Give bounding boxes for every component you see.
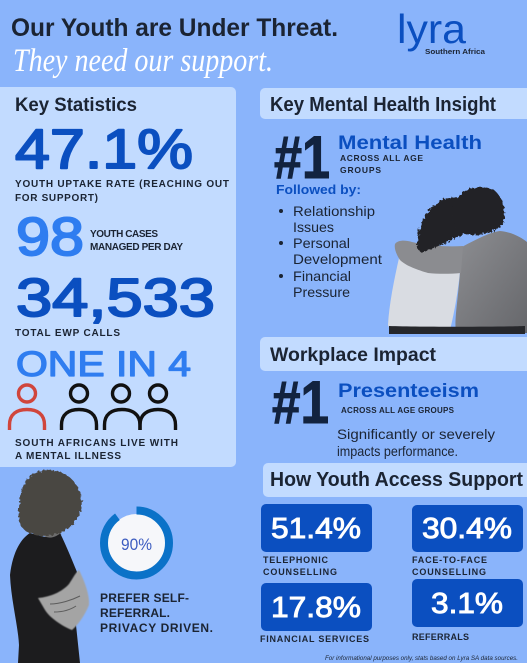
stat: #1 presenteeism: Presenteeism (338, 381, 479, 402)
stat: 47.1%: 47.1% (15, 117, 193, 180)
logo: Lyra Southern Africa: Southern Africa (425, 47, 486, 56)
stat: 98 (16, 207, 183, 267)
stat card: telephonic counselling: 51.4% (271, 513, 361, 545)
stat card: referrals (412, 579, 523, 642)
stat card: telephonic counselling: TELEPHONIC (263, 555, 328, 565)
stat: 98: 98 (16, 207, 84, 267)
title: They need our support. (13, 43, 273, 79)
stat: one in 4 (10, 345, 191, 462)
text: prefer self-referral: PRIVACY DRIVEN. (100, 621, 213, 635)
stat: #1 presenteeism: ACROSS ALL AGE GROUPS (341, 406, 455, 415)
stat card: face-to-face counselling: 30.4% (422, 513, 512, 545)
list: followed by: Financial (293, 268, 351, 284)
title: Our Youth are Under Threat. (11, 14, 338, 42)
stat: #1 mental health (274, 124, 482, 191)
list: followed by: Personal (293, 235, 350, 251)
text: prefer self-referral (100, 591, 213, 635)
heading panel: how youth access support (263, 463, 527, 497)
icon: four people (10, 385, 176, 430)
stat: #1 presenteeism: Significantly or severely (337, 426, 495, 442)
stat: 34,533: TOTAL EWP CALLS (15, 328, 120, 339)
title (11, 14, 338, 79)
heading panel: workplace impact: Workplace Impact (270, 345, 437, 366)
stat card: face-to-face counselling: FACE-TO-FACE (412, 555, 487, 565)
stat: 47.1%: YOUTH UPTAKE RATE (REACHING OUT (15, 179, 229, 190)
list: followed by: Development (293, 251, 382, 267)
stat: #1 mental health: GROUPS (340, 165, 381, 175)
heading: key statistics: Key Statistics (15, 95, 137, 116)
stat: 98: YOUTH CASES (90, 229, 158, 240)
chart: 90% donut: 90% (121, 535, 152, 554)
stat card: face-to-face counselling: COUNSELLING (412, 567, 486, 577)
stat: #1 presenteeism (272, 369, 495, 459)
text: prefer self-referral: REFERRAL. (100, 606, 170, 620)
heading panel: key mental health insight (260, 88, 527, 119)
stat: 47.1% (15, 117, 229, 204)
heading panel: how youth access support: How Youth Access Support (270, 469, 523, 491)
stat: one in 4: A MENTAL ILLNESS (15, 451, 121, 462)
stat card: financial services: FINANCIAL SERVICES (260, 634, 369, 644)
stat card: telephonic counselling (261, 504, 372, 577)
stat: 98: MANAGED PER DAY (90, 242, 183, 253)
text: prefer self-referral: PREFER SELF- (100, 591, 189, 605)
stat: #1 presenteeism: #1 (272, 369, 329, 436)
stat: one in 4: ONE IN 4 (16, 345, 191, 384)
stat: #1 presenteeism: impacts performance. (337, 443, 458, 459)
stat card: financial services: 17.8% (271, 592, 361, 624)
stat: 34,533: 34,533 (16, 268, 215, 328)
stat card: telephonic counselling: COUNSELLING (263, 567, 337, 577)
list: followed by: Issues (293, 219, 334, 235)
footnote: For informational purposes only, stats based on Lyra SA data sources. (325, 655, 518, 662)
stat: 47.1%: FOR SUPPORT) (15, 193, 98, 204)
image: two women embracing (388, 187, 527, 334)
list: followed by: Relationship (293, 203, 375, 219)
heading panel: workplace impact (260, 337, 527, 371)
image: boy with folded arms (10, 470, 89, 663)
logo: Lyra Southern Africa: lyra (397, 6, 466, 52)
stat card: financial services (260, 583, 372, 644)
panel: key statistics (0, 87, 236, 467)
stat card: referrals: 3.1% (431, 588, 503, 620)
stat card: face-to-face counselling (412, 505, 523, 577)
chart: 90% donut (104, 510, 169, 576)
stat card: referrals: REFERRALS (412, 632, 469, 642)
stat: one in 4: SOUTH AFRICANS LIVE WITH (15, 438, 178, 449)
logo: Lyra Southern Africa (397, 6, 486, 56)
stat: #1 mental health: ACROSS ALL AGE (340, 153, 423, 163)
stat: #1 mental health: #1 (274, 124, 330, 191)
list: followed by: Pressure (293, 284, 350, 300)
heading panel: key mental health insight: Key Mental Health Insight (270, 94, 496, 116)
list: followed by (276, 182, 382, 300)
stat: #1 mental health: Mental Health (338, 133, 482, 154)
stat: 34,533 (15, 268, 215, 339)
list: followed by: Followed by: (276, 182, 361, 197)
